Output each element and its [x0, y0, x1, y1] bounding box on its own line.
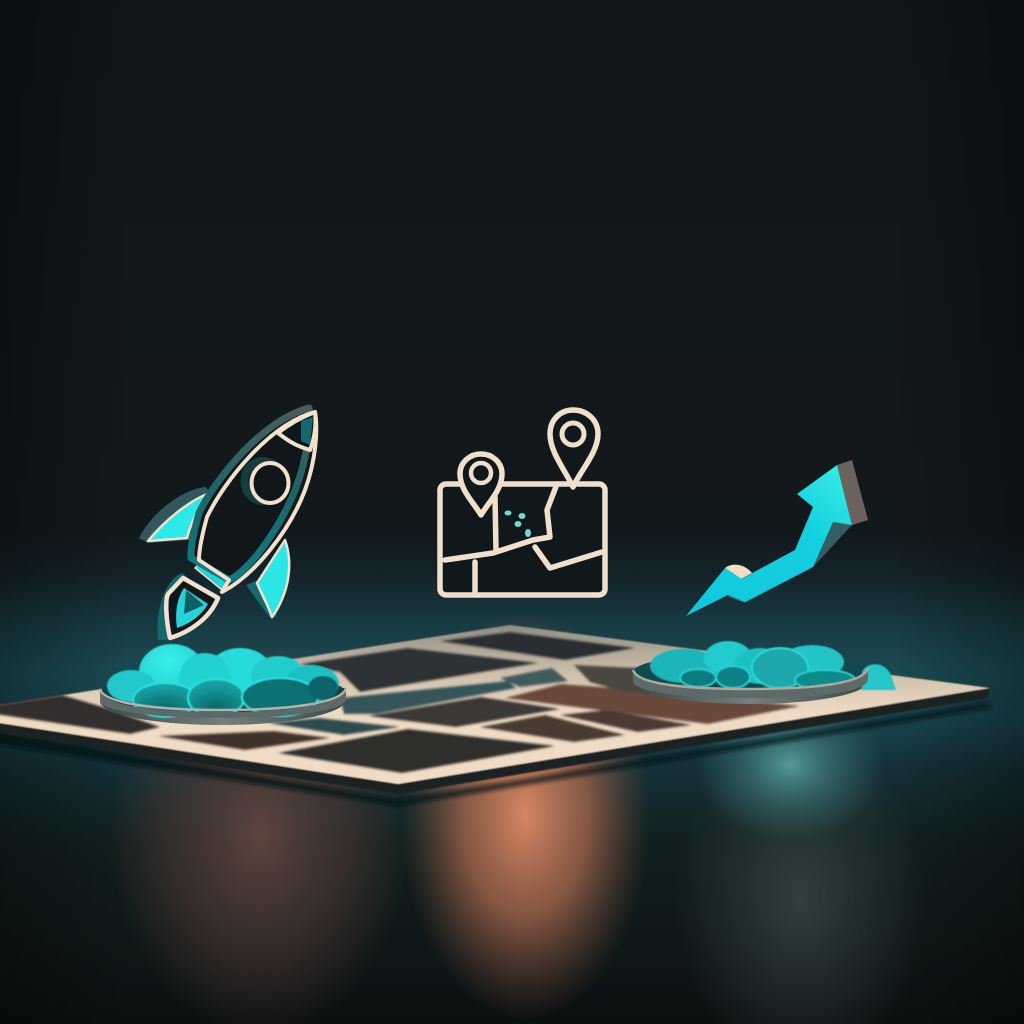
- large pin: [550, 410, 598, 487]
- plate top: [0, 625, 990, 784]
- arrow top: [686, 465, 852, 616]
- arrow end face: [837, 460, 868, 525]
- dish rim: [100, 688, 346, 710]
- map frame: [440, 484, 605, 595]
- left dish with clouds: [100, 644, 346, 725]
- rocket left fin: [139, 487, 212, 543]
- map roads: [445, 484, 557, 560]
- rocket window: [244, 461, 288, 503]
- arrow bump: [725, 565, 752, 579]
- clouds: [107, 644, 339, 717]
- rocket nose: [278, 412, 315, 450]
- icon: rocket: [139, 408, 316, 640]
- clouds: [650, 641, 896, 690]
- icon: map with pins: [440, 410, 605, 595]
- floor reflections: [110, 610, 925, 1024]
- dish inner: [101, 671, 345, 713]
- map route dots: [504, 510, 531, 537]
- plate panes: [0, 632, 800, 773]
- dish front lip: [100, 688, 346, 718]
- dish body: [633, 668, 868, 704]
- dish rim: [633, 668, 868, 689]
- plate shadow: [0, 702, 990, 806]
- dish body: [100, 688, 346, 725]
- rocket flame: [157, 573, 218, 640]
- rocket band: [195, 561, 230, 590]
- rocket right fin: [246, 542, 286, 618]
- right dish with clouds: [633, 641, 896, 704]
- small pin: [460, 454, 502, 515]
- icon: growth arrow: [686, 460, 868, 616]
- plate edge: [0, 688, 990, 794]
- map plate: [0, 625, 990, 806]
- rocket body extrusion: [191, 408, 309, 580]
- dish inner: [634, 654, 866, 688]
- rocket body: [199, 412, 316, 592]
- dish front lip: [633, 668, 868, 698]
- arrow side: [728, 520, 852, 603]
